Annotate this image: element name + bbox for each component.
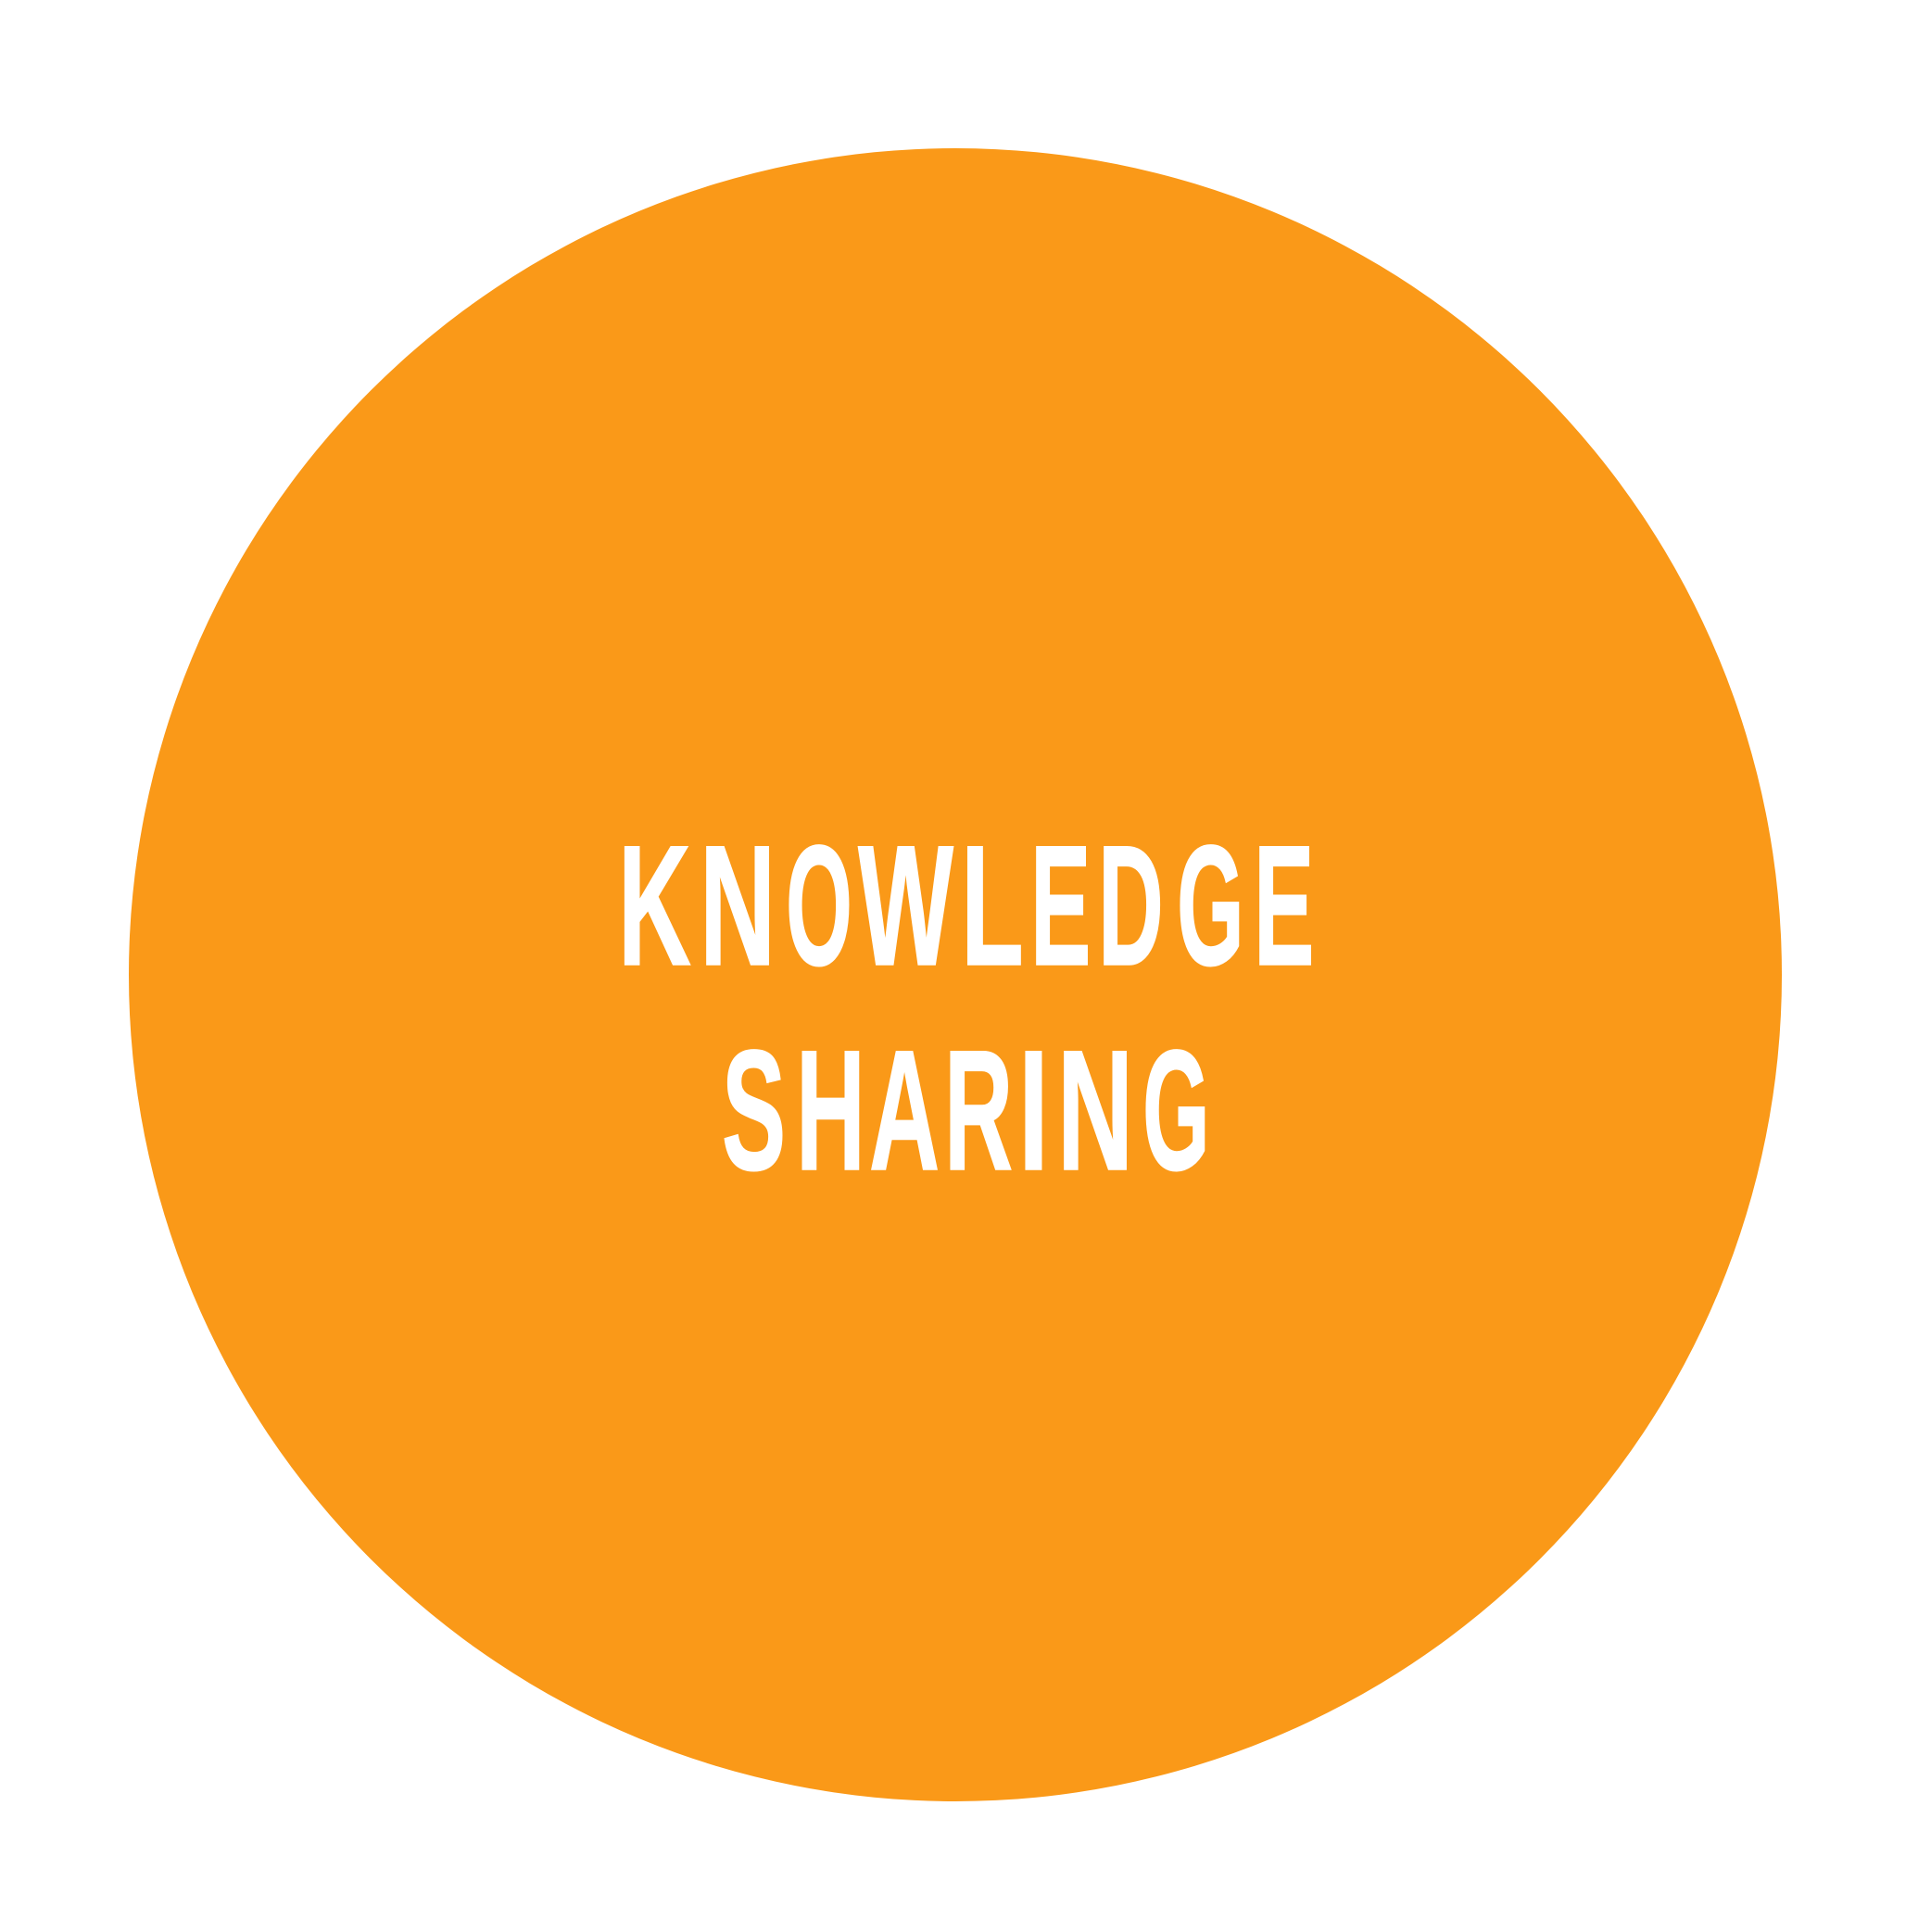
title line 1: L [961, 811, 1024, 1002]
title line 1: N [700, 811, 776, 1002]
title line 1: E [1254, 811, 1315, 1002]
title line 2: G [1142, 1016, 1209, 1206]
title line 2 [722, 1016, 1209, 1206]
title line 1 [618, 811, 1315, 1002]
title line 2: H [796, 1016, 865, 1206]
title line 1: K [618, 811, 691, 1002]
title line 1: G [1177, 811, 1244, 1002]
title line 1: E [1030, 811, 1091, 1002]
title line 2: R [944, 1016, 1013, 1206]
title line 2: A [869, 1016, 940, 1206]
title: knowledge sharing [618, 811, 1315, 1206]
title line 1: W [858, 811, 953, 1002]
title line 2: N [1057, 1016, 1133, 1206]
title line 2: I [1018, 1016, 1049, 1206]
title line 1: O [786, 811, 852, 1002]
title line 2: S [722, 1016, 786, 1206]
title line 1: D [1098, 811, 1164, 1002]
